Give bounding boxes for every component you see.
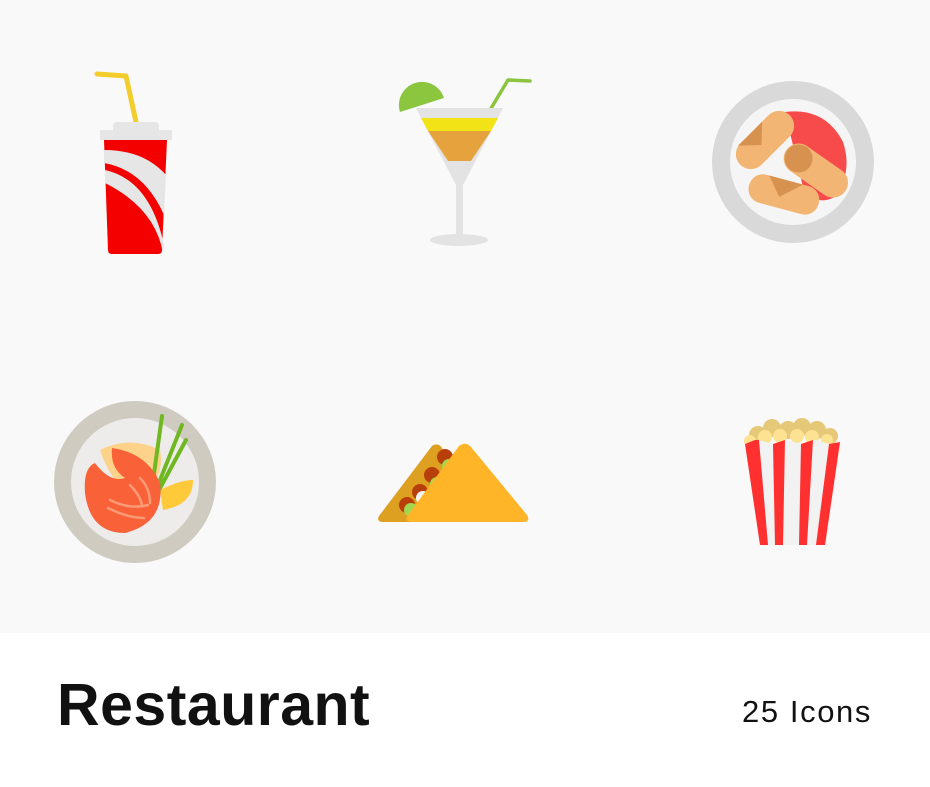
icon: spring rolls plate bbox=[712, 81, 874, 243]
icon: popcorn bbox=[744, 418, 841, 545]
icon: salmon plate bbox=[54, 401, 216, 563]
icon: cocktail bbox=[399, 80, 530, 246]
icon: sandwich bbox=[378, 444, 528, 522]
text: icon count: 25 Icons bbox=[742, 694, 872, 729]
title: Restaurant bbox=[57, 672, 370, 738]
icon: soda cup bbox=[97, 74, 172, 254]
